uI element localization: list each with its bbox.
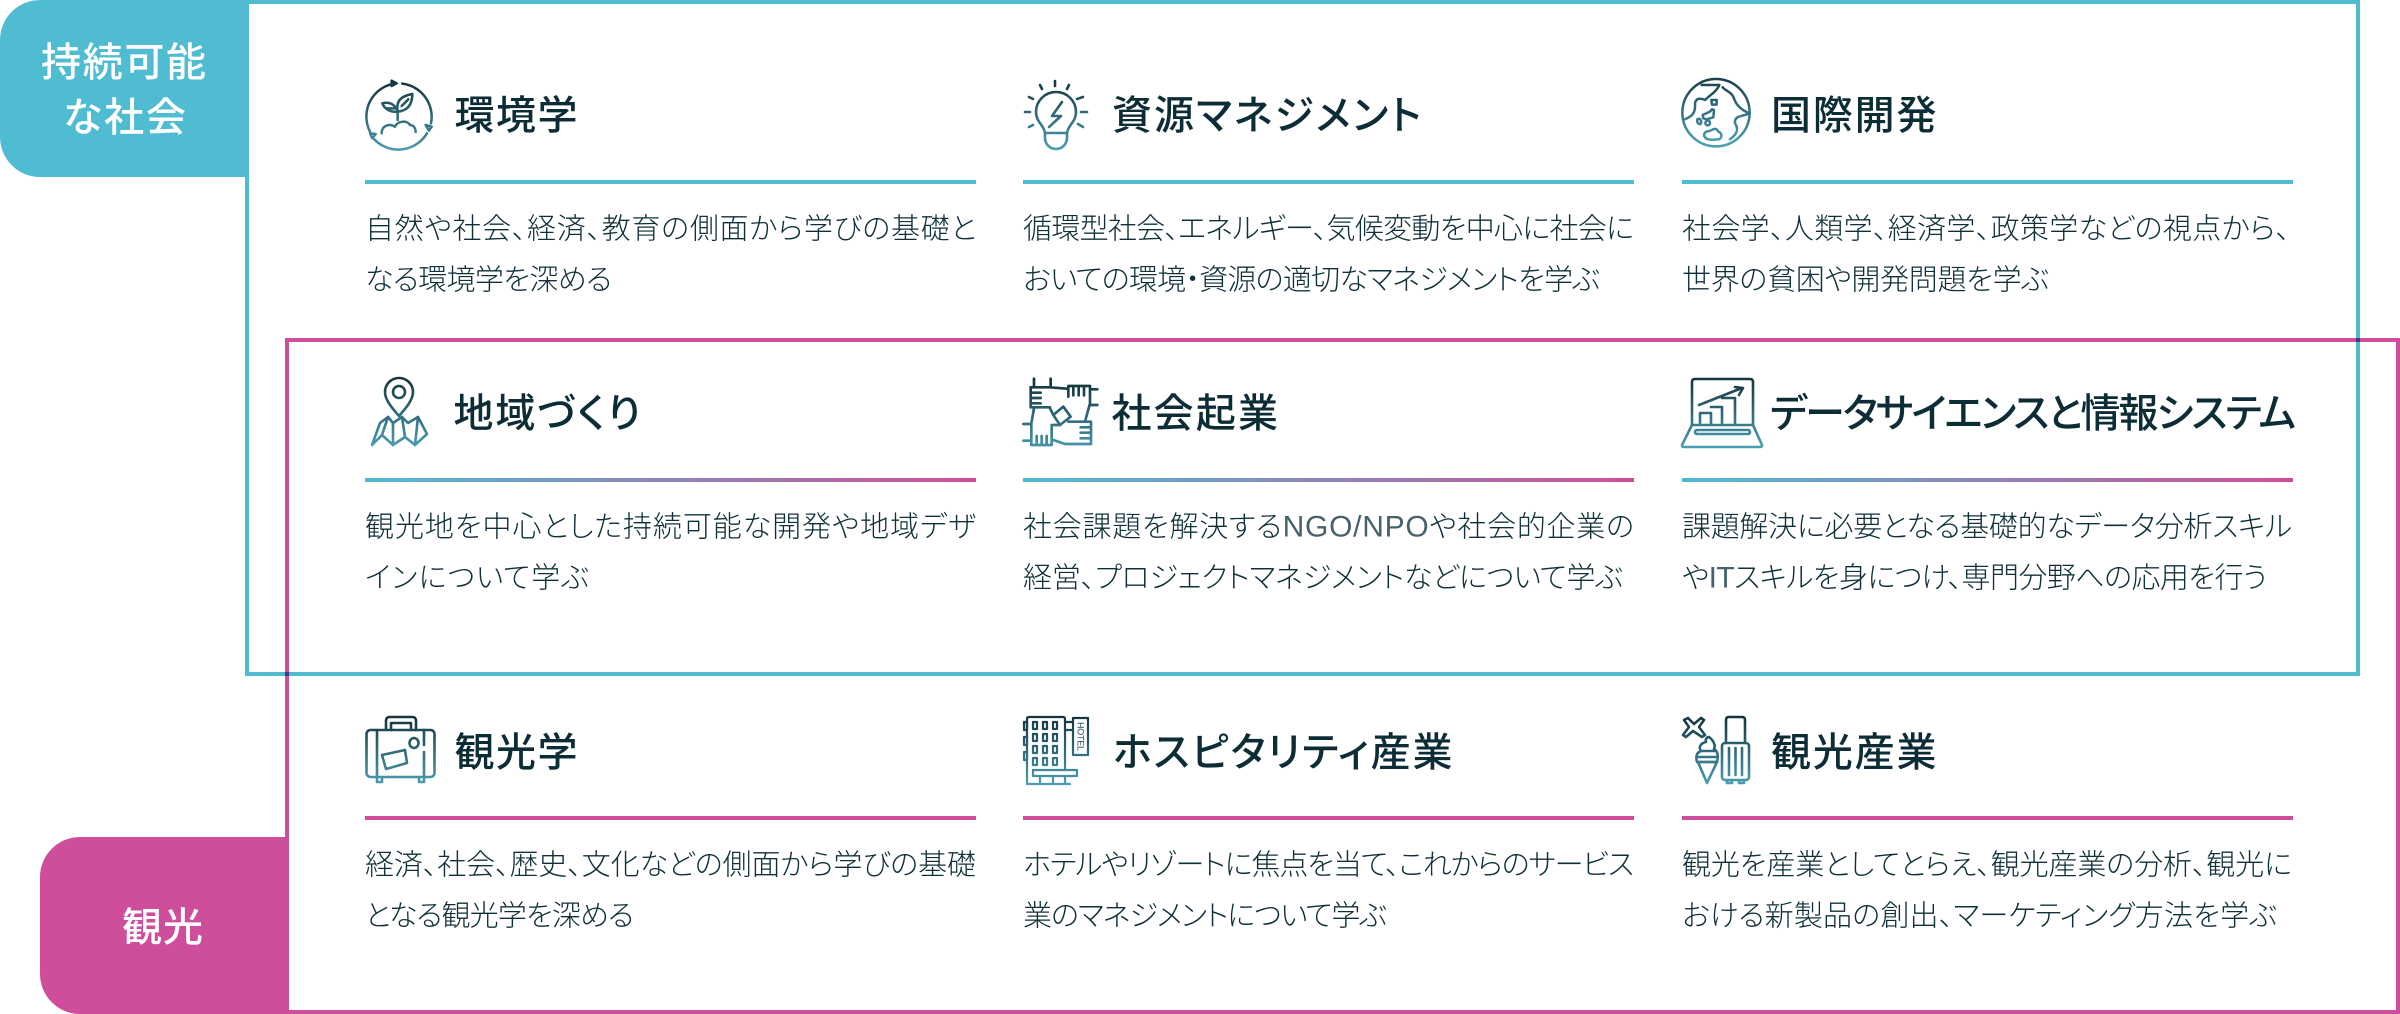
description: 社会学、人類学、経済学、政策学などの視点から、 <box>1682 212 2290 246</box>
icon: plane, ice cream and luggage <box>1683 717 1749 783</box>
description: 世界の貧困や開発問題を学ぶ <box>1682 264 2049 296</box>
divider <box>1023 180 1634 184</box>
icon label: HOTEL sign: HOTEL <box>1076 722 1086 751</box>
icon: globe <box>1682 79 1750 146</box>
heading: データサイエンスと情報システム <box>1770 392 2296 436</box>
heading: 国際開発 <box>1771 94 1936 138</box>
panel: tourism frame <box>287 340 2398 1012</box>
heading: 地域づくり <box>454 392 640 436</box>
description: 経営、プロジェクトマネジメントなどについて学ぶ <box>1023 562 1623 594</box>
description <box>1682 212 2290 296</box>
card: 観光学 <box>365 717 976 932</box>
description: ホテルやリゾートに焦点を当て、これからのサービス <box>1023 848 1634 882</box>
icon: light bulb <box>1025 81 1087 149</box>
description <box>1023 510 1634 594</box>
icon: laptop with chart <box>1682 379 1762 447</box>
description <box>1682 848 2292 932</box>
icon: sprout in recycling circle <box>366 81 432 150</box>
heading: ホスピタリティ産業 <box>1113 731 1452 775</box>
description <box>365 848 976 932</box>
heading: 観光産業 <box>1771 731 1936 775</box>
divider <box>365 180 976 184</box>
heading: 環境学 <box>454 94 578 138</box>
card: 国際開発 <box>1682 79 2293 296</box>
description <box>1682 510 2292 594</box>
description <box>1023 848 1634 932</box>
card: データサイエンスと情報システム <box>1682 379 2296 594</box>
description: なる環境学を深める <box>365 264 612 296</box>
card: ホスピタリティ産業 <box>1023 717 1634 932</box>
heading: 社会起業 <box>1112 392 1278 436</box>
description: おいての環境・資源の適切なマネジメントを学ぶ <box>1023 264 1600 296</box>
description: 経済、社会、歴史、文化などの側面から学びの基礎 <box>365 848 976 882</box>
description: インについて学ぶ <box>365 562 589 594</box>
tab: 観光 <box>40 837 289 1014</box>
heading: 観光学 <box>454 731 578 775</box>
tab: 持続可能な社会: な社会 <box>63 96 186 140</box>
divider <box>365 478 976 482</box>
card: 環境学 <box>365 81 976 296</box>
card: 資源マネジメント <box>1023 81 1634 296</box>
description: おける新製品の創出、マーケティング方法を学ぶ <box>1682 900 2277 932</box>
description: 観光を産業としてとらえ、観光産業の分析、観光に <box>1682 848 2292 882</box>
description: 自然や社会、経済、教育の側面から学びの基礎と <box>365 212 976 246</box>
icon: hotel <box>1024 717 1088 784</box>
description: 業のマネジメントについて学ぶ <box>1023 900 1387 932</box>
tab: 観光: 観光 <box>122 906 203 950</box>
description: となる観光学を深める <box>365 900 634 932</box>
description: 循環型社会、エネルギー、気候変動を中心に社会に <box>1023 212 1634 246</box>
divider <box>1023 478 1634 482</box>
divider <box>1682 478 2293 482</box>
tab: 持続可能な社会: 持続可能 <box>41 41 206 85</box>
description <box>1023 212 1634 296</box>
divider <box>1682 180 2293 184</box>
description <box>365 212 976 296</box>
icon: four joined hands <box>1023 379 1097 445</box>
icon: suitcase <box>366 717 434 782</box>
description: 社会課題を解決するNGO/NPOや社会的企業の <box>1023 510 1634 544</box>
card: 地域づくり <box>365 378 976 594</box>
description: 課題解決に必要となる基礎的なデータ分析スキル <box>1682 510 2292 544</box>
heading: 資源マネジメント <box>1112 94 1421 138</box>
divider <box>1023 816 1634 820</box>
divider <box>365 816 976 820</box>
divider <box>1682 816 2293 820</box>
card: 社会起業 <box>1023 379 1634 594</box>
description <box>365 510 976 594</box>
description: やITスキルを身につけ、専門分野への応用を行う <box>1682 562 2267 594</box>
icon: map pin <box>372 378 427 445</box>
card: 観光産業 <box>1682 717 2293 932</box>
panel: sustainable society frame <box>247 2 2358 674</box>
description: 観光地を中心とした持続可能な開発や地域デザ <box>365 510 976 544</box>
tab: 持続可能な社会 <box>0 0 248 177</box>
